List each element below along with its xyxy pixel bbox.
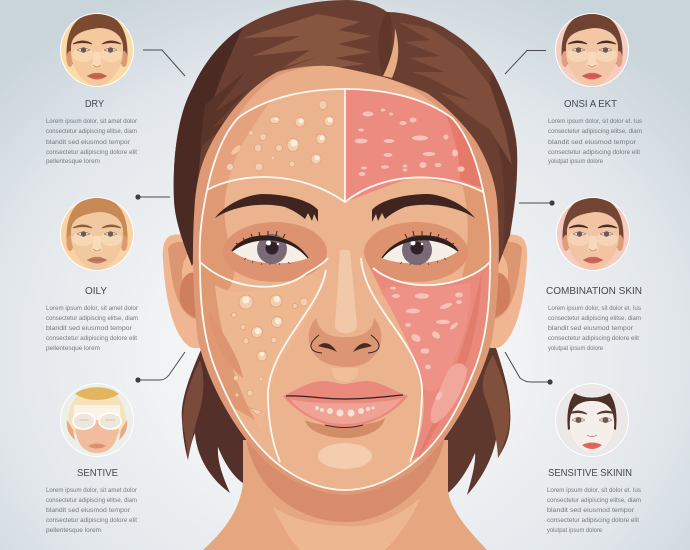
text block: oily: Lorem ipsum dolor, sit amet dolor (46, 305, 139, 312)
connector: top right (505, 50, 546, 74)
connector: combination skin (519, 200, 555, 206)
text block: dry: blandit sed eiusmod tempor (46, 139, 131, 146)
cheeks side shade (200, 183, 255, 420)
connector: sensitive skin (505, 352, 553, 385)
thumbnail: oily (60, 197, 134, 272)
text block: onsi a ekt: consectetur adipiscing dolore elit (548, 149, 640, 156)
label: oily: OILY (85, 285, 107, 297)
connector: sentive (135, 352, 185, 383)
connector: oily (135, 194, 170, 200)
back hair lower locks (182, 340, 510, 495)
text block: onsi a ekt: Lorem ipsum dolor, sit dolor et. Ius (548, 118, 643, 125)
text block: onsi a ekt: yolutpat ipsum dolore (548, 158, 603, 165)
text block: sentive (46, 487, 138, 534)
text block: oily: pellentesque lorem (46, 345, 100, 352)
neck (203, 440, 487, 550)
text block: sentive: consectetur adipiscing elitse, diam (46, 497, 137, 504)
skin of head (193, 66, 499, 495)
text block: combination skin: Lorem ipsum dolor, sit dolor et. Ius (548, 305, 642, 312)
mouth (283, 381, 408, 438)
brow bone light (226, 208, 322, 235)
red flakes cheek right (390, 286, 463, 402)
text block: sentive: consectetur adipiscing dolore elit (46, 517, 137, 524)
label: dry: DRY (85, 98, 104, 110)
text block: sensitive skin: Lorem ipsum dolor, sit dolor et. Ius (547, 487, 642, 494)
text block: dry: consectetur adipiscing elitse, diam (46, 128, 137, 135)
text block: combination skin: blandit sed eiusmod tempor (548, 325, 634, 332)
thumbnail: sentive (60, 383, 134, 457)
text block: sensitive skin: blandit sed eiusmod tempor (547, 507, 635, 514)
label: onsi a ekt: ONSI A EKT (564, 98, 618, 110)
text block: dry (46, 118, 138, 165)
red flakes forehead right (354, 108, 464, 176)
text block: onsi a ekt: blandit sed eiusmod tempor (548, 139, 637, 146)
thumbnail: combination skin (556, 197, 630, 272)
text block: dry: Lorem ipsum dolor, sit amet dolor (46, 118, 138, 125)
text block: sentive: blandit sed eiusmod tempor (46, 507, 131, 514)
label: sensitive skinin: SENSITIVE SKININ (548, 467, 632, 479)
text block: sensitive skin (547, 487, 642, 534)
text block: oily: consectetur adipiscing dolore elit (46, 335, 137, 342)
ears (163, 234, 527, 348)
white zone outlines (200, 89, 490, 490)
thumbnail: dry (60, 13, 134, 88)
connector: dry (143, 50, 185, 76)
hair light streaks (243, 14, 372, 72)
cheek right zone (367, 262, 495, 462)
text block: sentive: Lorem ipsum dolor, sit amet dolor (46, 487, 138, 494)
central face illustration (163, 0, 527, 550)
text block: oily: blandit sed eiusmod tempor (46, 325, 133, 332)
text block: combination skin (548, 305, 642, 352)
dry spots cheek left (232, 295, 308, 415)
cheek left zone (215, 285, 255, 419)
forehead left shade (208, 102, 270, 187)
thumbnail: top right (555, 13, 629, 88)
forehead right zone (346, 90, 476, 201)
eyebrows (215, 194, 475, 222)
label: sentive: SENTIVE (77, 467, 118, 479)
text block: sensitive skin: consectetur adipiscing dolore elit (547, 517, 639, 524)
text block: oily (46, 305, 139, 352)
nose (309, 250, 381, 382)
text block: onsi a ekt: consectetur adipiscing elitse, diam (548, 128, 642, 135)
dry spots forehead left (226, 100, 334, 171)
text block: dry: consectetur adipiscing dolore elit (46, 149, 137, 156)
eyes (232, 231, 458, 265)
text block: combination skin: consectetur adipiscing dolore elit (548, 335, 639, 342)
text block: combination skin: consectetur adipiscing elitse, diam (548, 315, 641, 322)
neck shadow and highlight (245, 430, 446, 522)
hair part line (383, 28, 398, 78)
hair dome (174, 0, 517, 266)
text block: sensitive skin: consectetur adipiscing elitse, diam (547, 497, 641, 504)
chin highlight (318, 443, 372, 469)
text block: oily: consectetur adipiscing elitse, diam (46, 315, 138, 322)
text block: dry: pellentesque lorem (46, 158, 100, 165)
thumbnail: sensitive skin (555, 383, 629, 457)
text block: combination skin: yolutpat ipsum dolore (548, 345, 603, 352)
label: combination skin: COMBINATION SKIN (546, 285, 642, 297)
text block: sentive: pellentesque lorem (46, 527, 101, 534)
eye socket shade (223, 222, 327, 282)
text block: sensitive skin: yolutpat ipsum dolore (547, 527, 602, 534)
text block: onsi a ekt (548, 118, 643, 165)
face map fill (215, 90, 489, 489)
